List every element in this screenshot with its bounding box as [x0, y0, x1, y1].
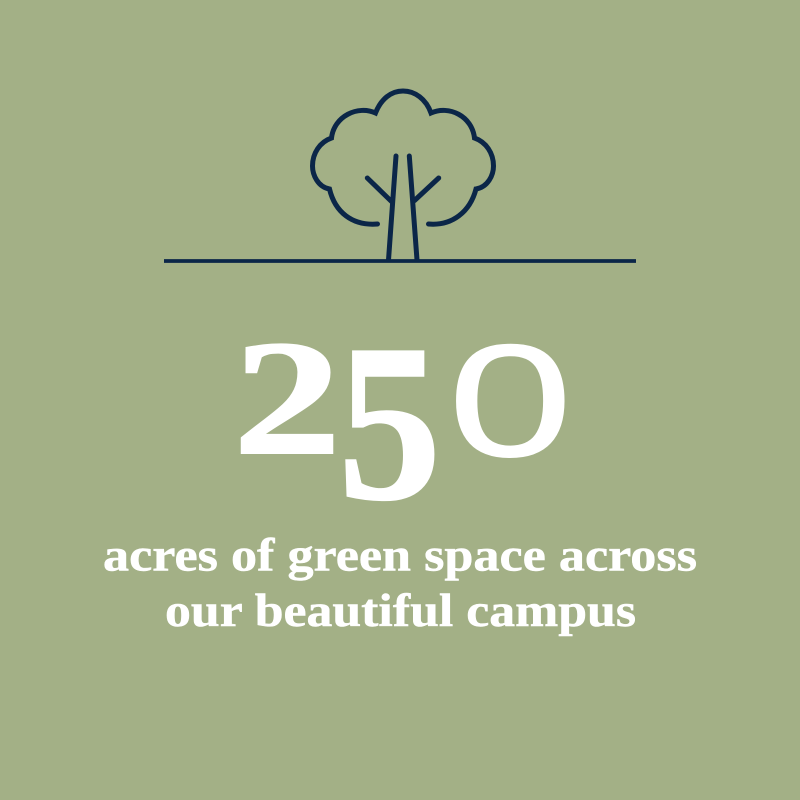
caption text: [103, 530, 697, 637]
big number: 250: 0: [448, 312, 573, 491]
caption text: our beautiful campus: [165, 585, 636, 637]
tree trunk: [388, 156, 417, 260]
caption text: acres of green space across: [103, 530, 697, 582]
ground line: [164, 259, 636, 263]
icon: tree on ground line: [164, 91, 636, 261]
big number: 250: 2: [233, 307, 341, 489]
tree crown outline: [312, 91, 494, 224]
tree branches: [367, 178, 439, 202]
big number: 250: [233, 298, 573, 547]
big number: 250: 5: [338, 298, 441, 547]
